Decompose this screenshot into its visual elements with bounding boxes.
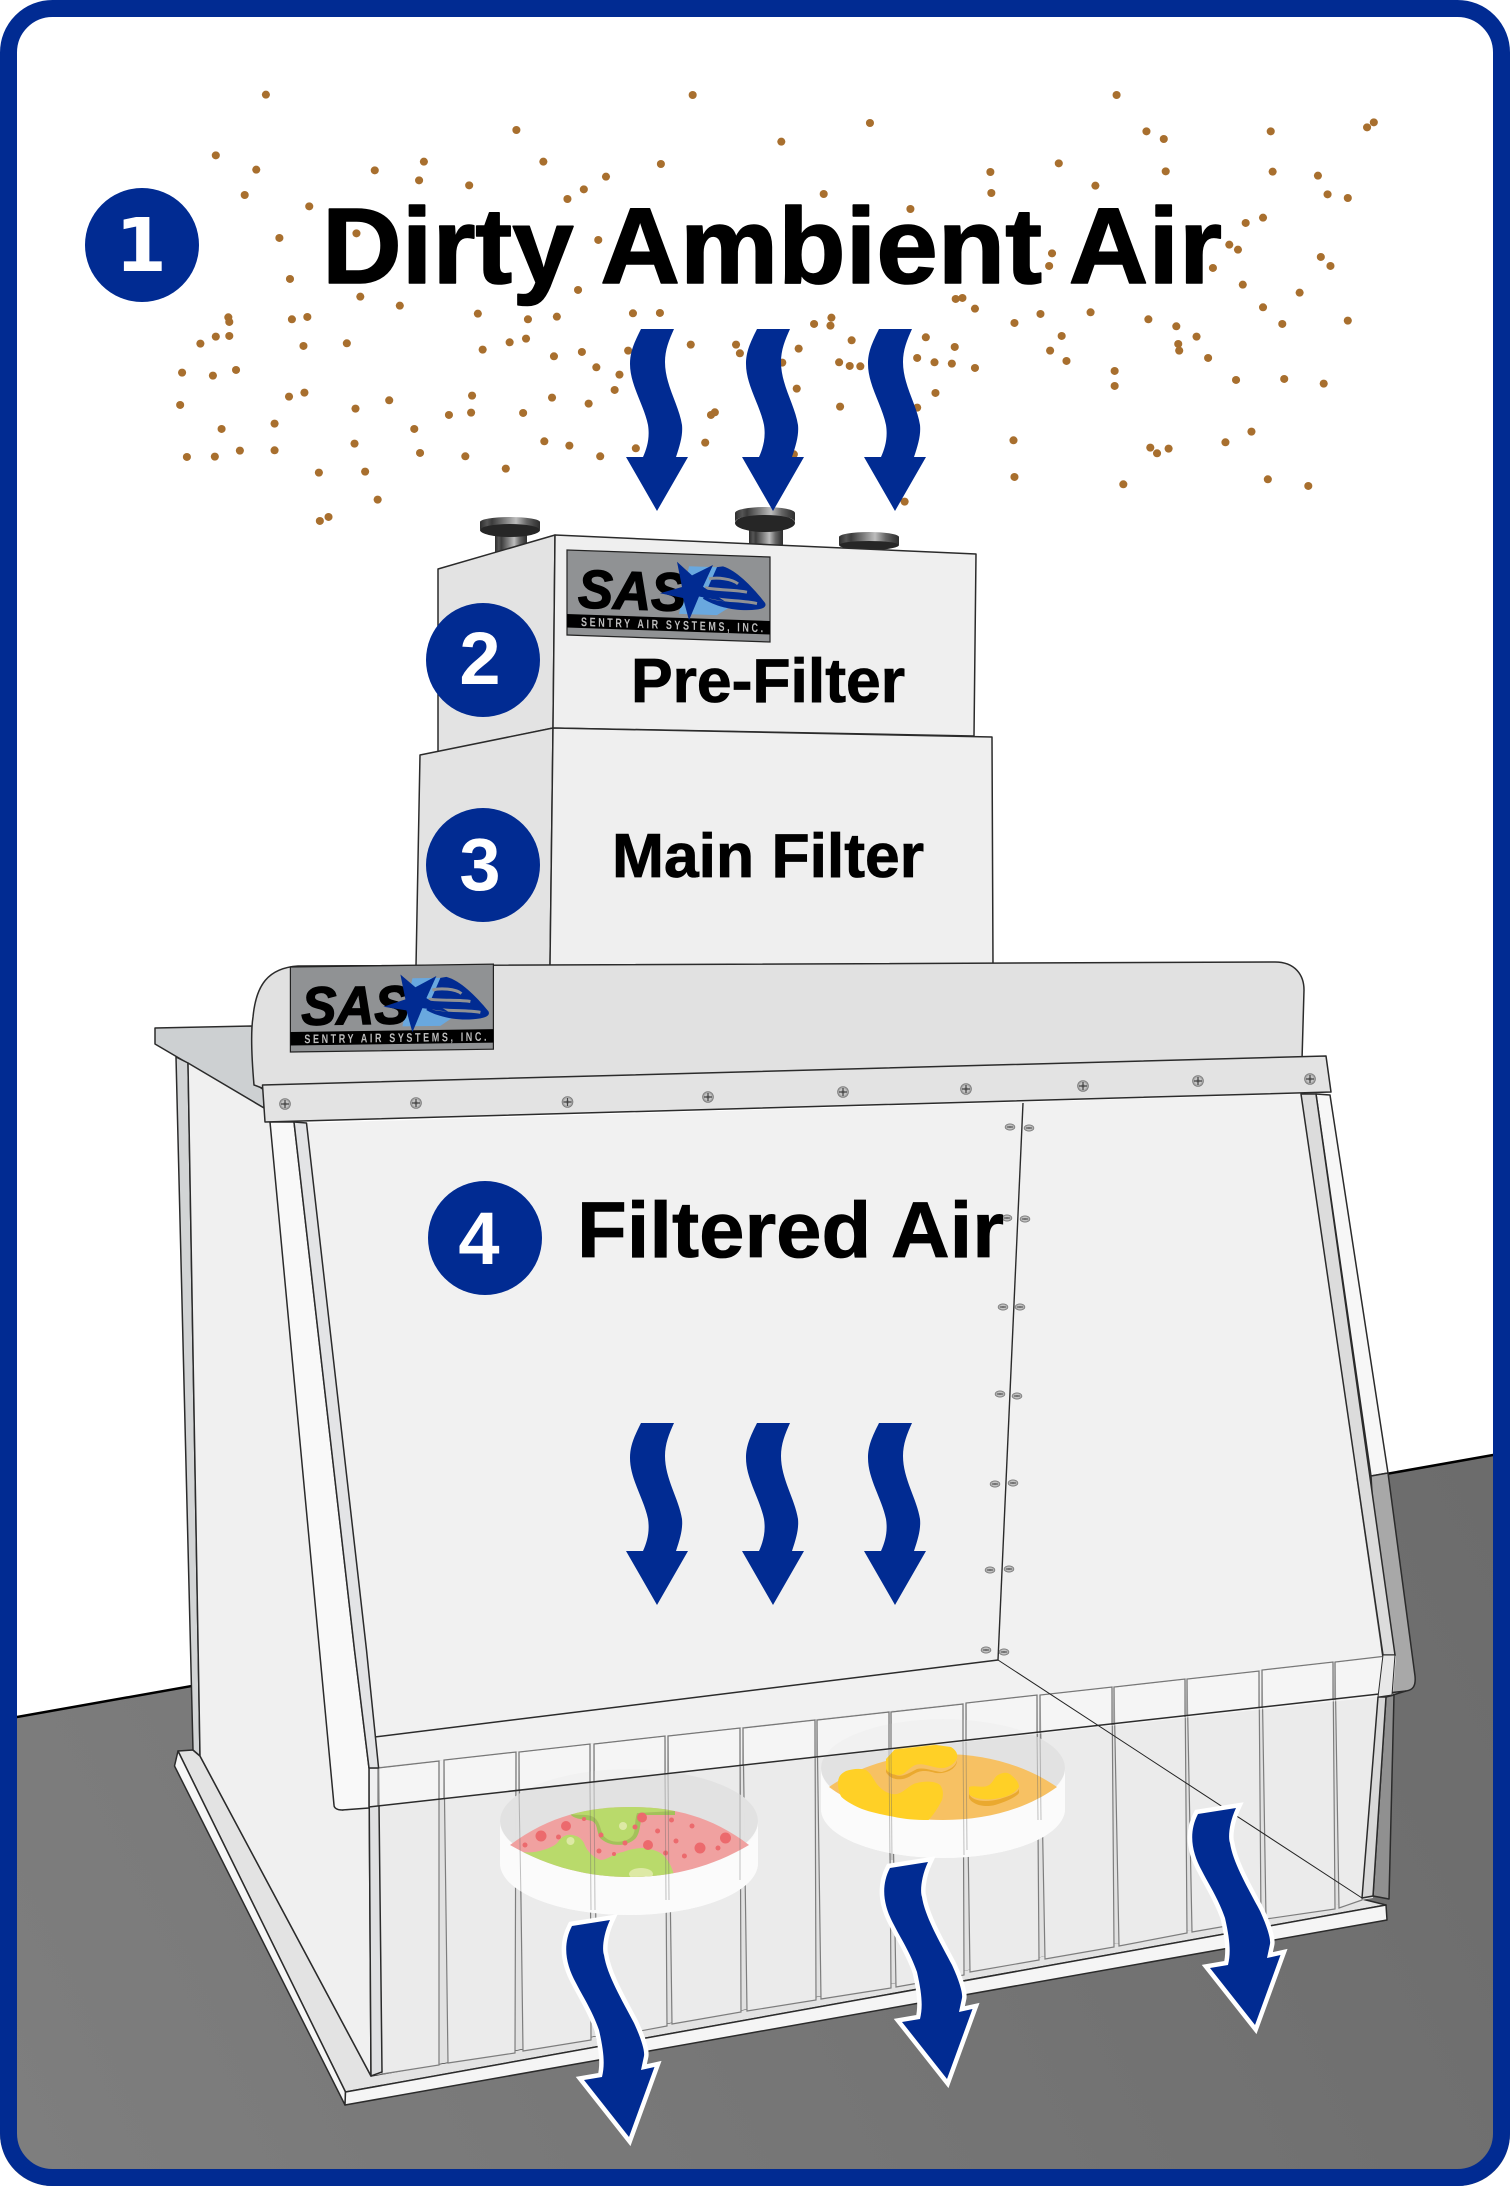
fold line [998, 1660, 1362, 1898]
translucent rim band [334, 1656, 1396, 1810]
exhaust arrows [566, 1808, 1280, 2137]
center seam [998, 1103, 1023, 1660]
step 1 badge [85, 188, 199, 302]
logo on pre-filter: SENTRY AIR SYSTEMS, INC. [581, 616, 763, 636]
cabinet side panel [188, 1063, 371, 2076]
knob 2 [735, 507, 795, 546]
step 4 badge: 4 [458, 1197, 500, 1280]
hood front panel [306, 1094, 1406, 1898]
logo on pre-filter [567, 550, 770, 642]
seam screws [981, 1124, 1034, 1655]
culture [829, 1754, 1057, 1820]
dust particles [176, 91, 1378, 525]
step 4 badge [428, 1181, 542, 1295]
pre-filter label: Pre-Filter [631, 647, 905, 716]
filtered air label: Filtered Air [577, 1185, 1004, 1274]
logo on hood: SAS [301, 975, 409, 1037]
step 3 badge [426, 808, 540, 922]
slat lines seen through the dishes [519, 1733, 1041, 1910]
right hood strip [1301, 1094, 1395, 1697]
petri dish: yellow culture [821, 1719, 1065, 1858]
floor [0, 1452, 1510, 2186]
base plinth [174, 1750, 1387, 2105]
open front slats [369, 1655, 1396, 2076]
logo on hood: SENTRY AIR SYSTEMS, INC. [304, 1030, 487, 1047]
left inner upright [369, 1768, 382, 2076]
knob 1 [480, 517, 540, 554]
step 3 badge: 3 [459, 823, 501, 906]
culture [510, 1807, 749, 1877]
slat tops [378, 1655, 1395, 1806]
right outer hood strip over floor [1316, 1094, 1415, 1695]
step 2 badge: 2 [459, 617, 501, 700]
airflow arrows into the pre-filter [626, 329, 926, 511]
main filter label: Main Filter [612, 822, 924, 891]
title: Dirty Ambient Air [322, 185, 1222, 306]
rear column [176, 1057, 200, 1756]
panel: pre-filter housing [438, 535, 976, 752]
airflow arrows inside the hood [626, 1423, 926, 1605]
knob 3 [839, 532, 899, 550]
rim line [342, 1691, 1406, 1810]
step 2 badge [426, 603, 540, 717]
side work shelf [155, 1026, 264, 1108]
step 1 badge: 1 [115, 203, 167, 289]
panel: main filter housing [416, 728, 993, 966]
left hood strips [270, 1122, 379, 1810]
title: Dirty Ambient Air [322, 185, 1222, 306]
logo on pre-filter: SAS [578, 559, 686, 623]
petri dish: red and green culture [500, 1769, 758, 1915]
logo on hood [290, 964, 493, 1052]
right uprights [1362, 1695, 1394, 1899]
hood back panel [252, 962, 1304, 1088]
top metal strip with screws [262, 1056, 1331, 1122]
